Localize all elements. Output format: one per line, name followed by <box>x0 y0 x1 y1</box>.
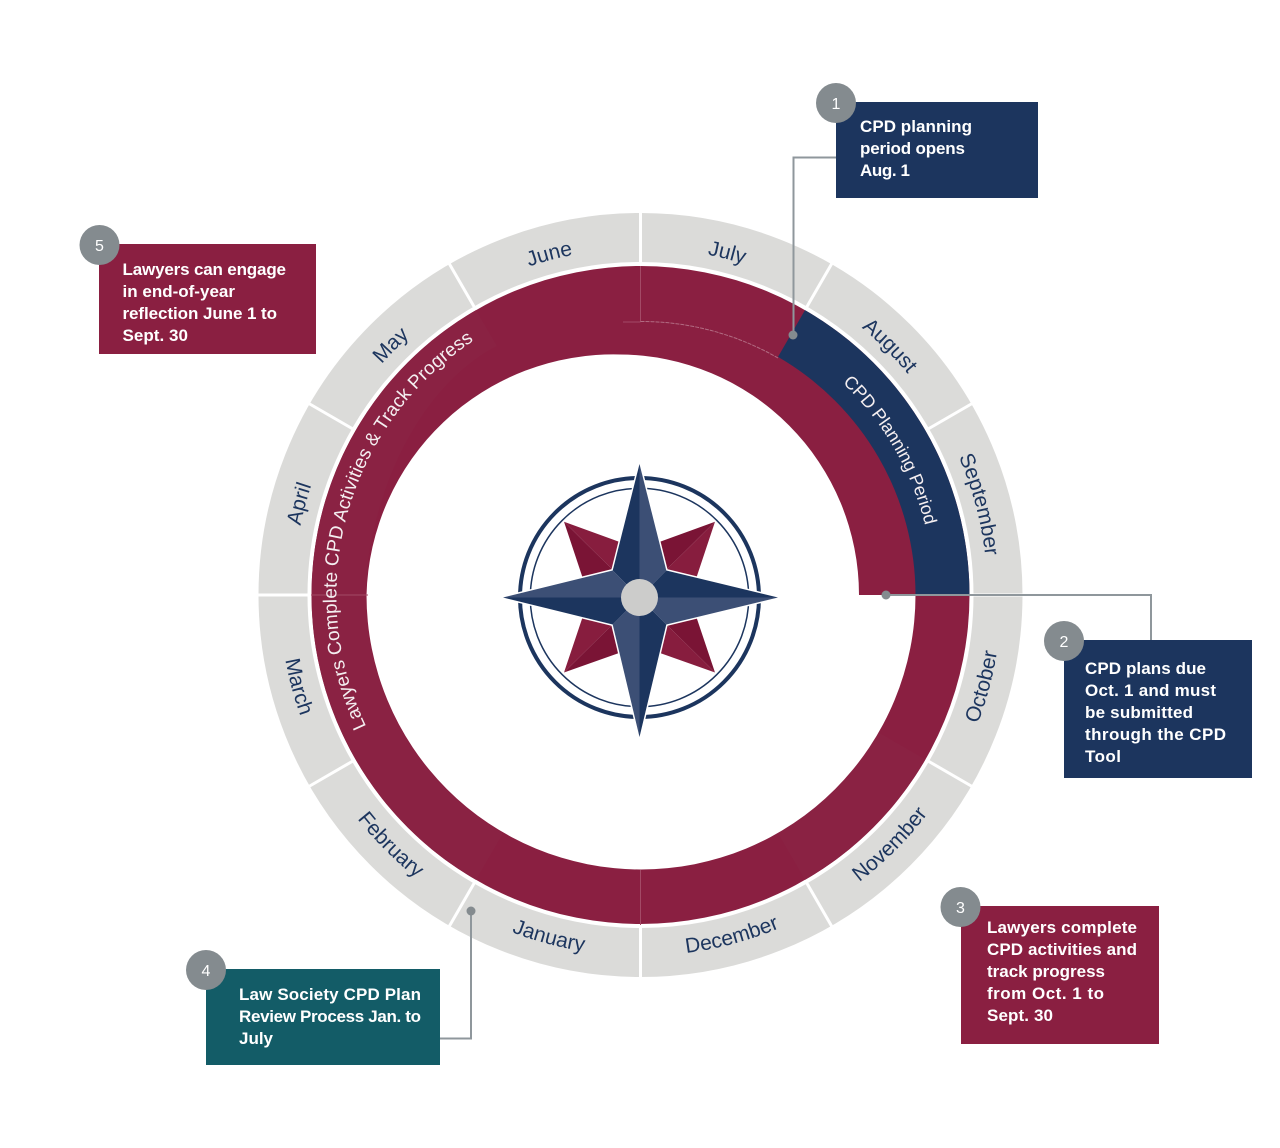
red star points <box>564 522 715 672</box>
month labels: March <box>286 658 312 715</box>
month labels: July <box>708 241 747 266</box>
callout 5: reflection June 1 to <box>122 304 277 323</box>
callout 1: period opens <box>860 139 965 158</box>
callout 3: from Oct. 1 to <box>987 984 1104 1003</box>
month labels: January <box>513 920 586 954</box>
month labels: June <box>528 244 572 266</box>
callout 1 <box>816 83 1038 198</box>
callout 3: CPD activities and <box>987 940 1137 959</box>
callout 2: CPD plans due <box>1085 659 1206 678</box>
callout 5: 5 <box>95 238 104 255</box>
callout 3: Lawyers complete <box>987 918 1137 937</box>
callout 5: Lawyers can engage <box>122 260 286 279</box>
month labels <box>286 241 996 954</box>
month labels: December <box>686 918 776 953</box>
callout 1: CPD planning <box>860 117 972 136</box>
callout 5: in end-of-year <box>122 282 235 301</box>
callout 5: Sept. 30 <box>122 326 188 345</box>
month labels: September <box>960 454 996 554</box>
callout 4: Review Process Jan. to <box>239 1007 421 1026</box>
callout 3 <box>940 887 1159 1044</box>
month labels: May <box>372 328 408 363</box>
month labels: October <box>966 650 996 722</box>
callout 4 <box>186 950 440 1065</box>
callout 4: 4 <box>202 963 211 980</box>
star halo <box>503 464 778 737</box>
connector 4 <box>440 906 476 1038</box>
callout 2: Tool <box>1085 747 1121 766</box>
planning period band <box>778 310 970 595</box>
month labels: April <box>288 482 311 526</box>
activity band: crimson ring <box>311 266 970 925</box>
month labels: February <box>358 811 424 877</box>
month labels: August <box>862 320 917 374</box>
band label: lawyers complete activities: Lawyers Complete CPD Activities & Track Progress <box>322 334 472 730</box>
callout 2: 2 <box>1060 634 1069 651</box>
callout 2 <box>1044 621 1252 778</box>
callout 1: Aug. 1 <box>860 161 910 180</box>
callout 2: Oct. 1 and must <box>1085 681 1216 700</box>
callout 3: track progress <box>987 962 1105 981</box>
connector 1 <box>788 158 836 340</box>
callout 5 <box>80 225 316 354</box>
month ring <box>258 213 1022 977</box>
callout 4: Law Society CPD Plan <box>239 985 421 1004</box>
band label: planning period: CPD Planning Period <box>845 376 938 524</box>
connector 2 <box>882 590 1151 640</box>
callout 4: July <box>239 1029 274 1048</box>
navy star points <box>503 464 778 737</box>
centre cut-out <box>366 354 916 870</box>
callout 1: 1 <box>832 96 841 113</box>
compass <box>503 464 778 737</box>
callout 2: be submitted <box>1085 703 1193 722</box>
month labels: November <box>852 807 926 881</box>
callout 3: Sept. 30 <box>987 1006 1053 1025</box>
callout 3: 3 <box>956 900 965 917</box>
callout 2: through the CPD <box>1085 725 1226 744</box>
